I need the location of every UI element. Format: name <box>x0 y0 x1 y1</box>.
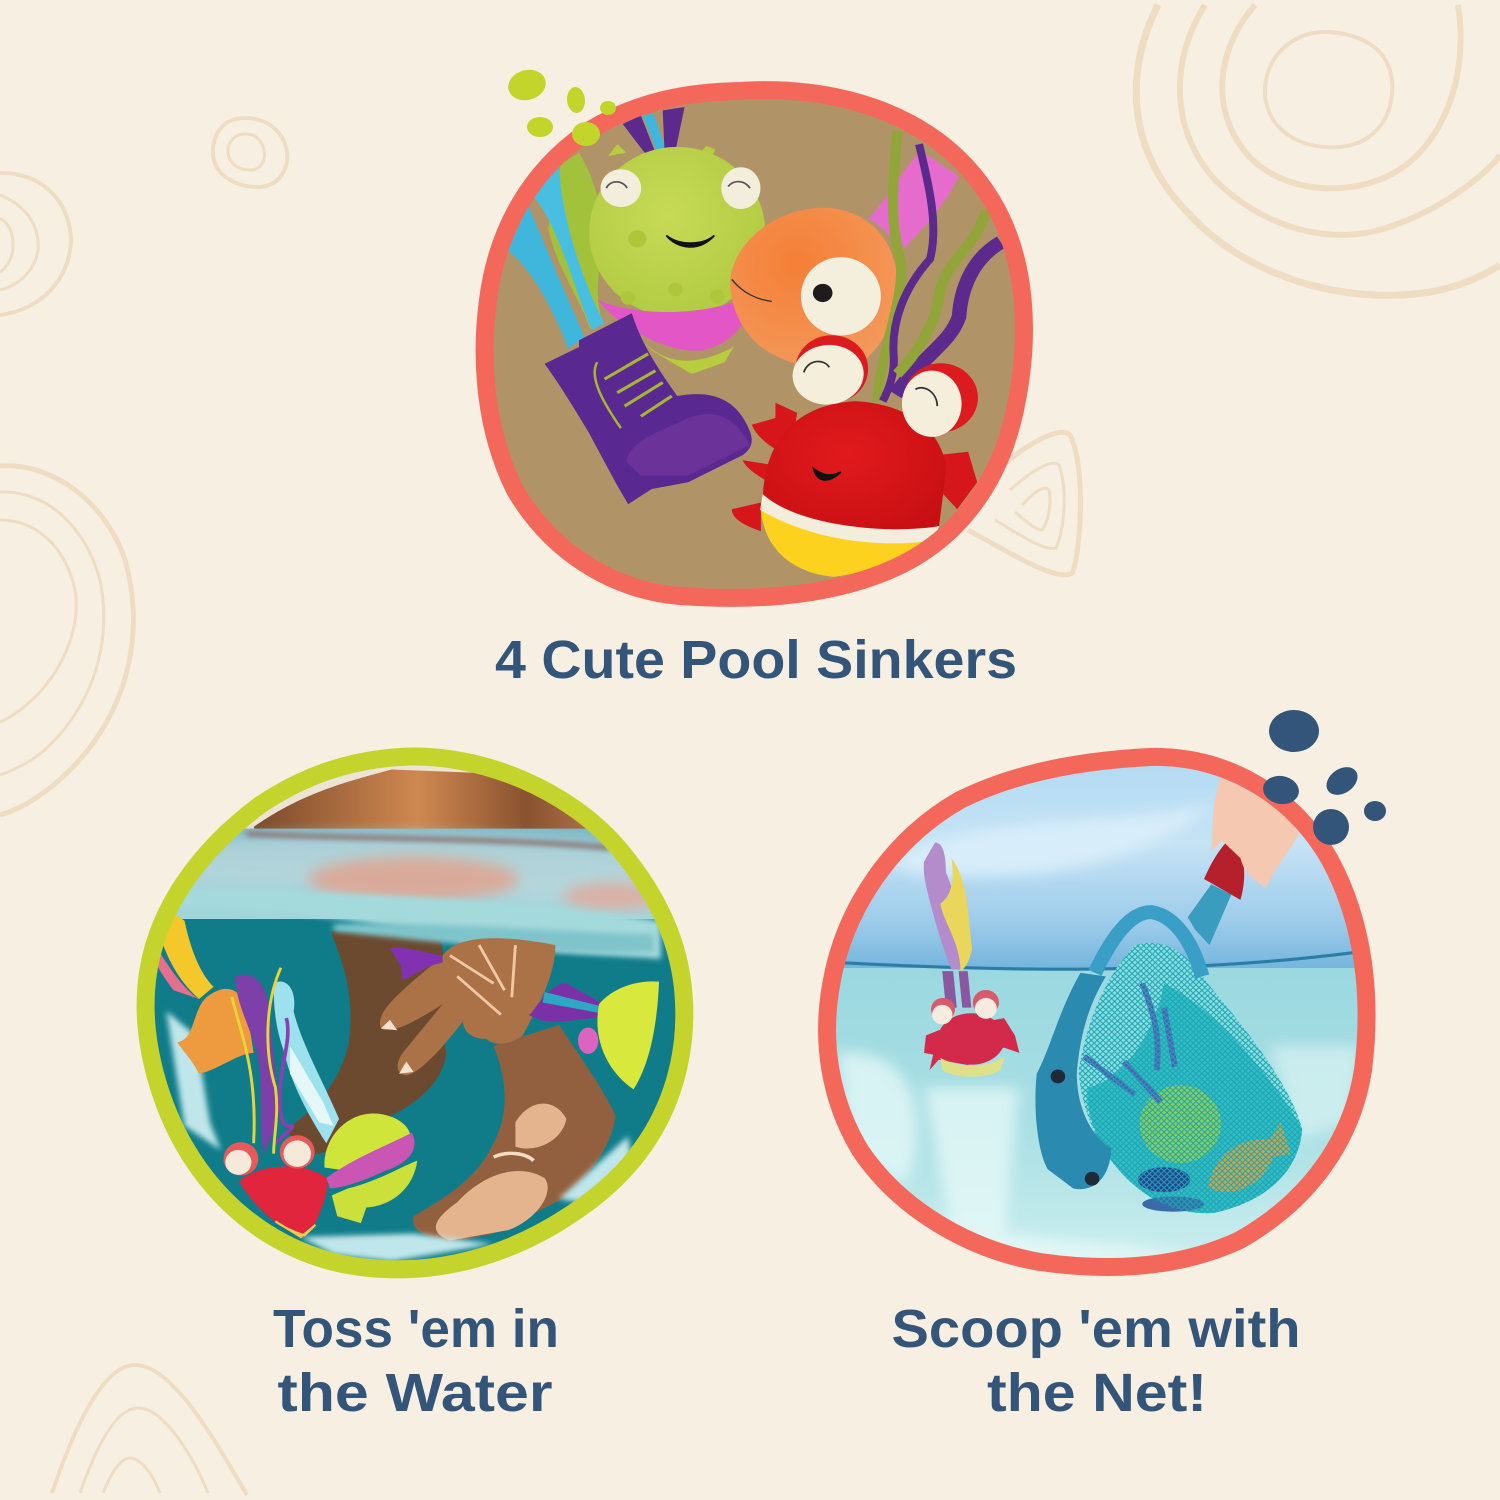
toy: net bag with contents <box>1079 943 1302 1213</box>
toy: net frame and handle <box>1035 836 1244 1189</box>
green outline <box>146 757 684 1269</box>
text: scoop caption <box>892 1299 1300 1423</box>
heading: 4 Cute Pool Sinkers: 4 Cute Pool Sinkers <box>495 630 1017 690</box>
coral outline <box>827 757 1367 1267</box>
icon: green dots <box>505 66 616 146</box>
toy: crab underwater <box>223 1135 327 1237</box>
toy: crab at surface <box>924 843 1019 1077</box>
panel: scoop with the net photo <box>815 740 1385 1283</box>
toy: green puffer underwater <box>324 1114 417 1223</box>
toy: purple boot <box>545 313 752 504</box>
toy: pink seaweed <box>868 151 959 252</box>
coral outline <box>485 90 1024 598</box>
ribbons left <box>155 910 214 999</box>
water light patches <box>166 1011 632 1261</box>
toy: orange fish underwater <box>177 989 254 1074</box>
seaweed ribbons left <box>508 107 685 349</box>
panel: toss in the water photo <box>130 740 700 1285</box>
water surface blur <box>308 892 665 962</box>
text: scoop caption: the Net! <box>987 1363 1207 1423</box>
hand <box>380 938 555 1075</box>
toy: green puffer <box>589 144 765 374</box>
toy: orange fish <box>730 208 897 369</box>
toy: yellow fish and ribbons <box>390 948 659 1089</box>
text: toss caption <box>273 1299 559 1423</box>
photo of four toys <box>494 99 1015 589</box>
clouds and light rays <box>837 803 1360 1268</box>
panel: 4 cute pool sinkers photo <box>470 80 1040 610</box>
toy: underwater ribbons <box>232 968 339 1154</box>
text: scoop caption: Scoop 'em with <box>892 1299 1300 1359</box>
legs and foot <box>286 931 615 1242</box>
toy: red crab <box>732 335 978 577</box>
hand <box>1211 778 1299 888</box>
toy: stems over orange fish <box>877 131 1001 401</box>
photo: underwater scene <box>154 766 676 1260</box>
icon: blue dots <box>1261 710 1386 845</box>
photo: sky and pool scene <box>836 766 1358 1258</box>
text: toss caption: the Water <box>278 1363 552 1423</box>
text: toss caption: Toss 'em in <box>273 1299 559 1359</box>
